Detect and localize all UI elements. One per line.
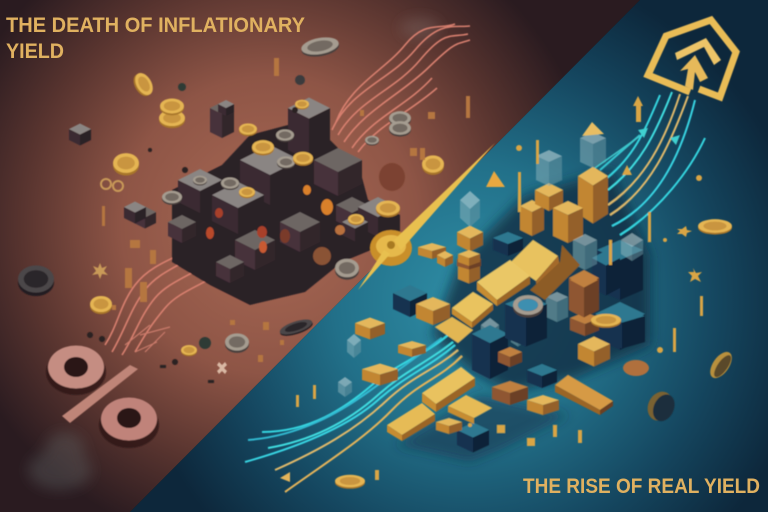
lower bars: [422, 367, 475, 404]
title: death of inflationary yield: [6, 14, 305, 63]
red streams lower: [105, 245, 238, 355]
lower left cyan and gold streams: [245, 335, 462, 492]
striped stack: [458, 266, 480, 284]
upper right streams to icon: [600, 92, 705, 235]
small gold blocks: [416, 297, 450, 325]
title: death of inflationary yield: YIELD: [6, 40, 64, 63]
gold coins right: [623, 360, 649, 376]
percent symbol: [46, 346, 159, 448]
crystals: [338, 132, 643, 397]
coins on block mass: [193, 100, 400, 265]
gold pyramids: [582, 122, 604, 136]
dark tower: [570, 272, 598, 318]
gold towers: [578, 166, 608, 224]
drop shadows under clusters: [395, 170, 650, 462]
gold pins and sparks: [296, 96, 703, 480]
smoke: [28, 18, 440, 490]
big bars: [510, 240, 558, 281]
scattered coins and debris left: [18, 35, 470, 383]
title: death of inflationary yield: THE DEATH OF INFLATIONARY: [6, 14, 305, 37]
dark navy right group: [597, 240, 643, 300]
central crumbling block mass: [134, 98, 400, 305]
icon: golden hexagon with upward arrow: [648, 20, 736, 97]
gold bars and cubes cluster: [280, 96, 736, 489]
navy cubes: [472, 325, 508, 379]
red streams upper: [332, 24, 470, 152]
gold needle dial: [358, 143, 495, 290]
